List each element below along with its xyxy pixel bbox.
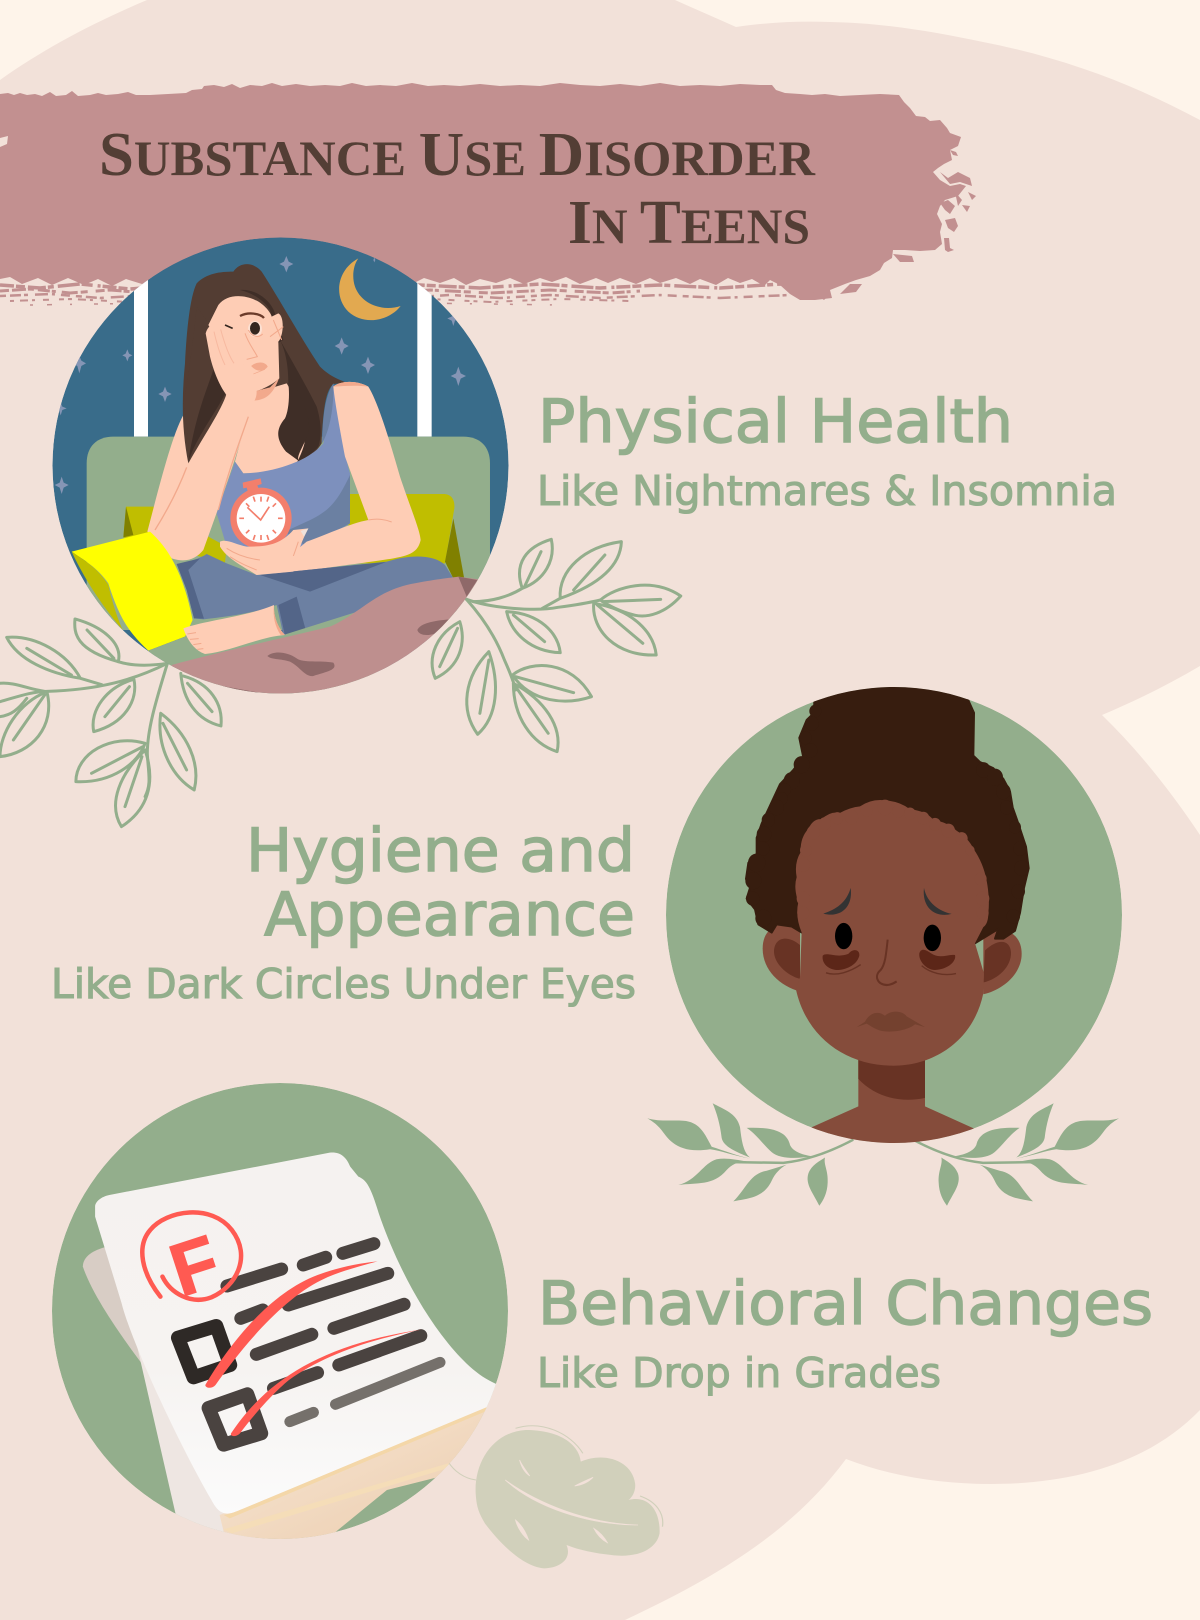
bed sheet [172,577,483,703]
title banner: brush stroke [0,83,976,300]
moon [339,258,401,320]
text lines [227,1244,421,1388]
title: IN TEENS [568,189,810,257]
foot [183,605,285,654]
back sheet [82,1247,141,1362]
hair [745,677,1029,943]
bed [148,612,374,694]
stars [55,256,466,494]
illustration: failed test paper [52,1083,508,1543]
red marks [142,1212,422,1436]
illustration: tired girl at night [52,238,508,703]
right arm [273,382,421,575]
eyes [835,923,852,949]
upper arm [147,416,188,532]
brows [823,888,851,915]
under-eye circles [823,950,859,970]
title [99,121,816,257]
heading: hygiene and appearance: Hygiene and [246,816,635,886]
chest [235,383,307,473]
window bars [134,263,432,437]
decorative big leaf [448,1426,663,1568]
nose [877,940,897,985]
face [795,800,989,1066]
shoulders and neck [811,1060,974,1143]
subheading: nightmares: Like Nightmares & Insomnia [537,467,1117,515]
subheading: drop in grades: Like Drop in Grades [537,1349,941,1397]
hand holding clock [230,478,292,549]
heading: hygiene and appearance: Appearance [264,880,635,950]
under sheets [138,1348,254,1538]
heading: behavioral changes: Behavioral Changes [538,1269,1153,1339]
propping hand [206,323,257,402]
checkboxes [178,1326,261,1445]
ears [763,924,800,991]
jeans [177,554,454,635]
headboard [87,437,490,630]
outlined leaves around first circle [0,539,681,827]
tank top [217,383,350,550]
mouth [857,1012,925,1032]
front pillow [72,532,193,651]
top sheet [95,1153,499,1514]
heading: hygiene and appearance [246,816,635,950]
heading: physical health: Physical Health [538,387,1013,457]
forearm [147,393,253,560]
banner speckles [0,284,830,306]
title: SUBSTANCE USE DISORDER [99,121,816,189]
grade letter: F [160,1219,229,1312]
filled laurel leaves [647,1103,1119,1206]
illustration: teen with dark circles [666,677,1122,1170]
hair back [183,264,347,463]
subheading: dark circles: Like Dark Circles Under Eyes [51,960,636,1008]
front hair strands [280,340,321,462]
face [208,296,283,392]
back pillows [123,507,227,563]
